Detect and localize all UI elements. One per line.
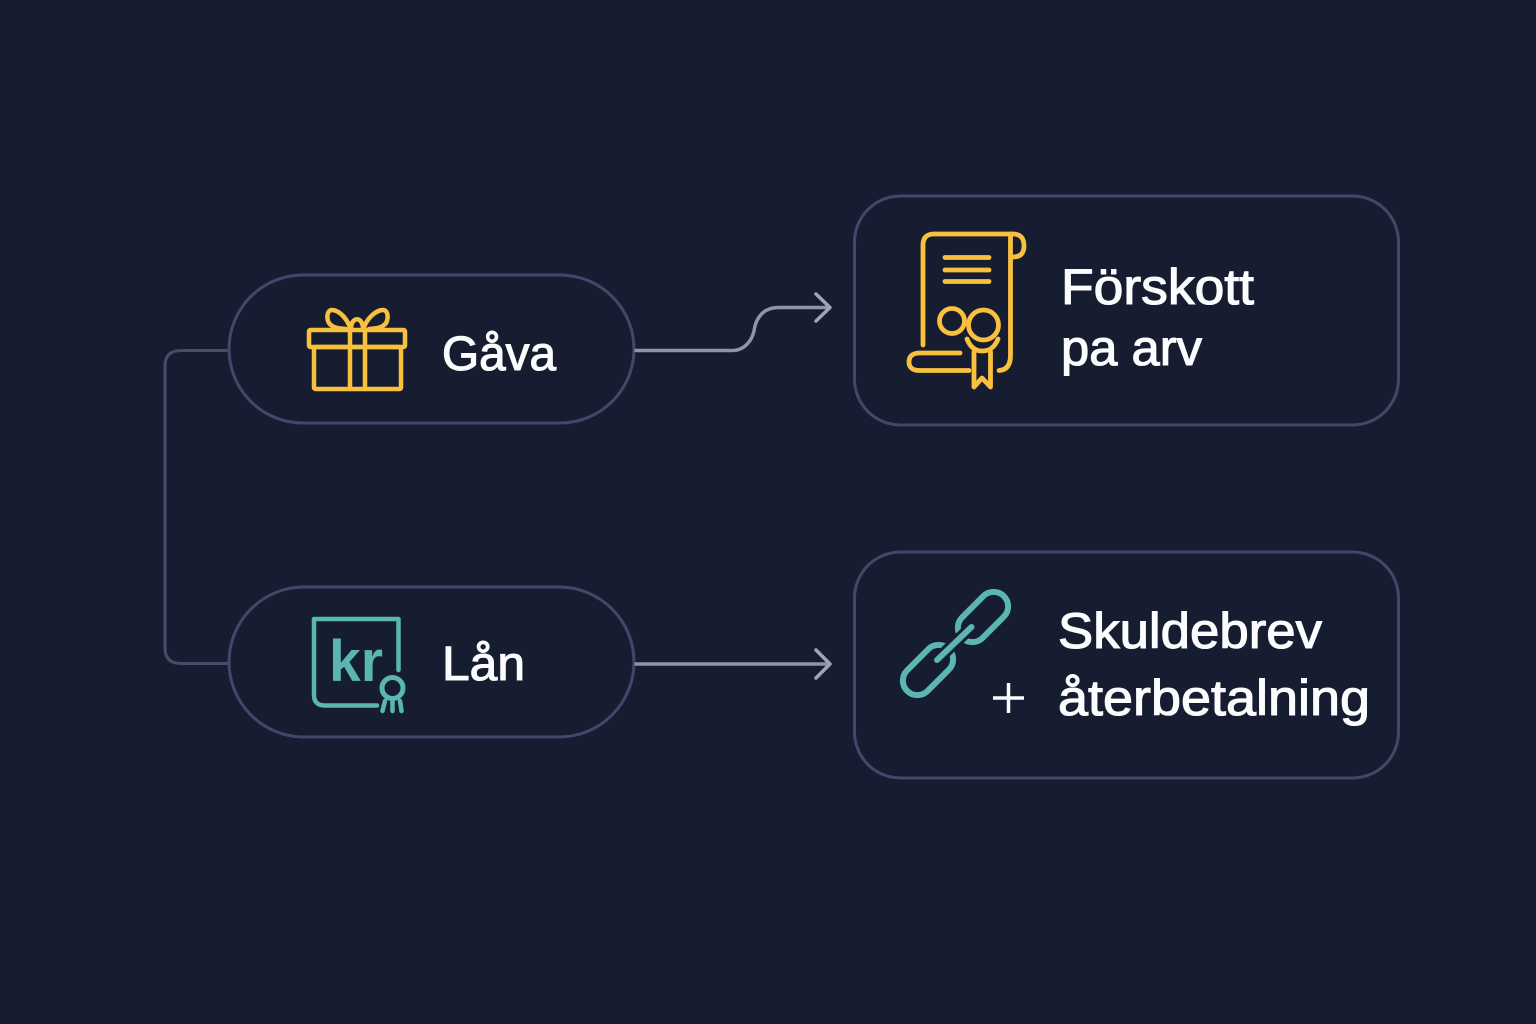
icon: gift: [309, 310, 405, 389]
text: Förskott på arv: [1061, 259, 1254, 376]
arrow: Lån to Skuldebrev: [636, 650, 830, 678]
text: Skuldebrev återbetalning: Skuldebrev: [1058, 603, 1322, 659]
icon: kr certificate: [314, 619, 403, 711]
label: Lån: Lån: [442, 638, 525, 691]
text: Förskott på arv: Förskott: [1061, 259, 1254, 315]
symbol: plus: [993, 683, 1024, 713]
text: Skuldebrev återbetalning: [1058, 603, 1370, 726]
arrow: Gåva to Förskott på arv: [636, 294, 830, 350]
icon: scroll with seal: [909, 234, 1024, 387]
panel: Gåva pill: [229, 275, 634, 423]
panel: Skuldebrev + återbetalning: [854, 552, 1398, 778]
label: Gåva: Gåva: [442, 328, 556, 381]
text: Skuldebrev återbetalning: återbetalning: [1058, 670, 1370, 726]
panel: Lån pill: [229, 587, 634, 737]
icon: kr certificate: kr: [329, 629, 383, 694]
panel: Förskott på arv: [854, 196, 1398, 425]
text: Förskott på arv: pa arv: [1061, 320, 1202, 376]
connector: Gåva to Lån: [165, 350, 229, 664]
icon: chain link: [897, 586, 1014, 701]
